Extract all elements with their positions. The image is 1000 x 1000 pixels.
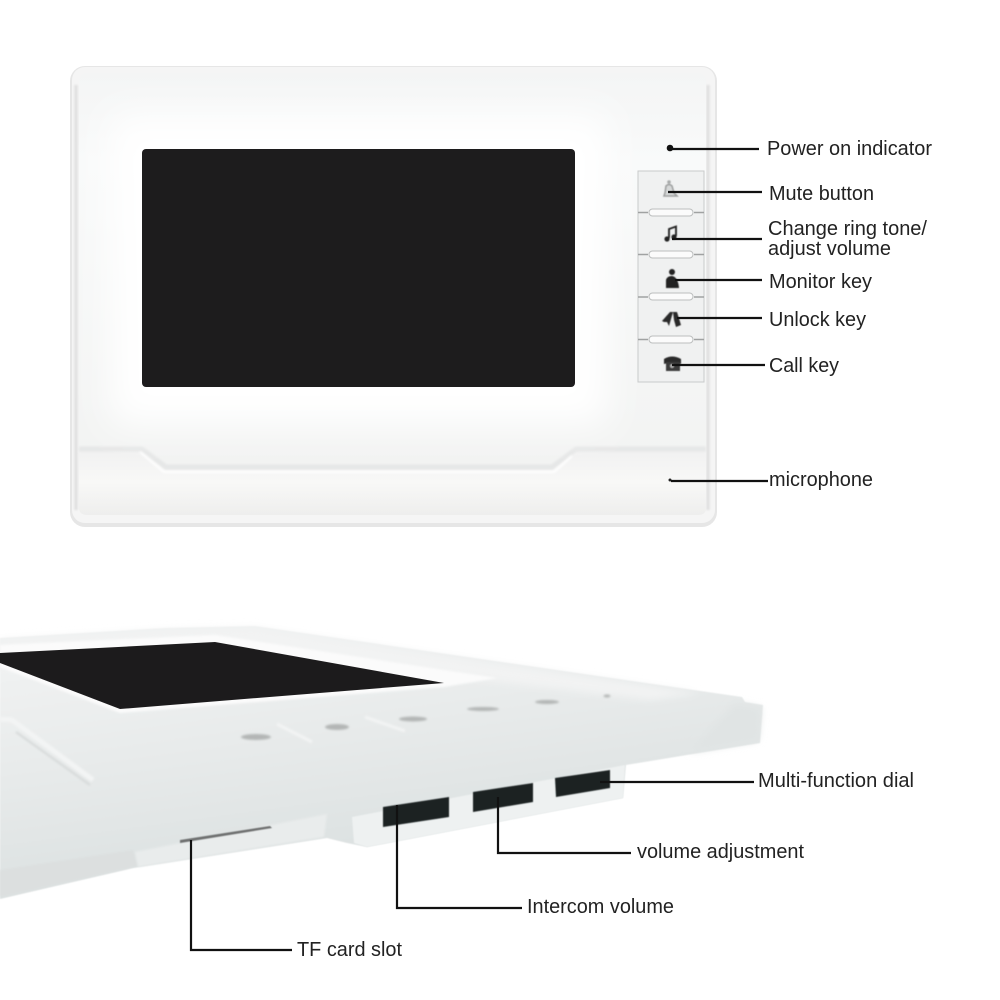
label: change ring tone / adjust volume: Change ring tone/	[768, 218, 927, 240]
label: monitor key: Monitor key	[769, 271, 872, 293]
label: power on indicator: Power on indicator	[767, 138, 932, 160]
keypad icons	[241, 694, 610, 740]
slot: volume adjustment wheel	[473, 783, 533, 812]
display screen	[142, 149, 575, 387]
icon: music note	[664, 226, 677, 242]
underside shadow	[0, 850, 138, 897]
slot: multi-function dial	[555, 770, 610, 797]
label: change ring tone / adjust volume	[768, 218, 927, 260]
lower panel section	[79, 450, 706, 515]
screen glow	[110, 115, 608, 425]
control tab	[352, 765, 625, 847]
label: intercom volume: Intercom volume	[527, 896, 674, 918]
TF card tab	[135, 814, 327, 867]
label: multi-function dial: Multi-function dial	[758, 770, 914, 792]
microphone hole	[668, 478, 672, 482]
label: mute button: Mute button	[769, 183, 874, 205]
label: call key: Call key	[769, 355, 839, 377]
right end face	[690, 703, 761, 752]
icon: keys	[662, 312, 681, 327]
label: change ring tone / adjust volume: adjust volume	[768, 238, 891, 260]
top surface highlight	[0, 628, 700, 700]
slot: intercom volume wheel	[383, 797, 449, 827]
power indicator dot	[667, 145, 673, 151]
icon: telephone	[664, 356, 681, 371]
key ridges	[277, 717, 405, 742]
label: volume adjustment: volume adjustment	[637, 841, 804, 863]
label: TF card slot: TF card slot	[297, 939, 402, 961]
display screen	[0, 642, 444, 709]
casing body	[0, 626, 763, 899]
panel: monitor front view	[70, 66, 717, 527]
panel: monitor bottom view	[0, 626, 763, 899]
lower panel ridge	[0, 719, 93, 780]
screen bezel	[0, 635, 497, 713]
TF card slot	[180, 826, 272, 843]
keypad	[638, 171, 704, 382]
label: unlock key: Unlock key	[769, 309, 866, 331]
label: microphone: microphone	[769, 469, 873, 491]
monitor casing	[70, 66, 717, 527]
icon: person	[666, 269, 679, 288]
leader lines	[191, 149, 768, 950]
icon: bell	[664, 180, 677, 196]
